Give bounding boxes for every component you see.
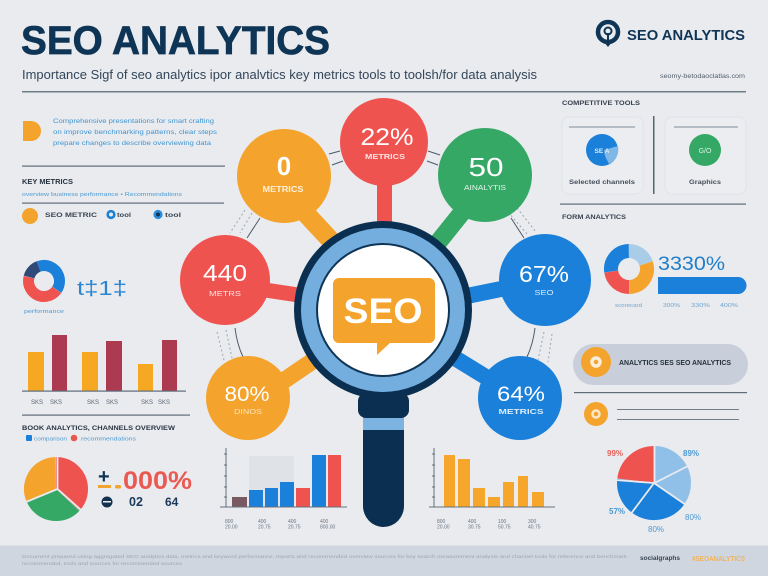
progress labels: 300% bbox=[663, 303, 680, 309]
node: 0 metrics bbox=[237, 129, 331, 223]
axis labels: 400 bbox=[258, 519, 267, 525]
axis labels bbox=[225, 519, 336, 530]
pie labels bbox=[607, 449, 701, 534]
axis labels: 30.75 bbox=[468, 524, 481, 530]
connector: green top right bbox=[436, 190, 480, 245]
stat row: 02 bbox=[129, 495, 143, 509]
donut chart: left bbox=[22, 259, 66, 315]
bar labels: SKS bbox=[31, 400, 43, 406]
bar labels: SKS bbox=[50, 400, 62, 406]
metric chip two bbox=[155, 211, 181, 219]
footer tag: #SEOANALYTICS bbox=[692, 556, 745, 563]
stat row: 64 bbox=[165, 495, 179, 509]
axis labels: 20.75 bbox=[258, 524, 271, 530]
node: 50 analytics: AINALYTIS bbox=[464, 185, 506, 192]
icon: location pin bbox=[598, 22, 618, 47]
axis labels: 50.75 bbox=[498, 524, 511, 530]
pie chart: bottom right bbox=[607, 445, 701, 534]
handle bbox=[358, 393, 409, 527]
key metrics note: overview business performance • Recommendations bbox=[22, 192, 182, 198]
metric chip one: tool bbox=[117, 213, 131, 219]
intro paragraph: on improve benchmarking patterns, clear steps bbox=[53, 129, 218, 136]
stat: percentage: 000% bbox=[123, 467, 192, 495]
legend: comparison bbox=[34, 436, 67, 442]
node: 67% seo: SEO bbox=[534, 288, 554, 297]
logo: SEO Analytics bbox=[598, 22, 745, 47]
website url: seomy-betodaoclatlas.com bbox=[660, 73, 745, 80]
metric chip two: tool bbox=[165, 213, 181, 219]
heading: key metrics: KEY METRICS bbox=[22, 177, 73, 186]
pill: analytics callout bbox=[573, 344, 748, 385]
heading: BOOK ANALYTICS, CHANNELS OVERVIEW bbox=[22, 425, 176, 432]
progress labels bbox=[615, 303, 738, 309]
bar chart: bottom centre right bbox=[429, 448, 555, 530]
axis labels bbox=[437, 519, 541, 530]
card: tool two bbox=[665, 117, 746, 194]
logo text: SEO ANALYTICS bbox=[627, 28, 745, 44]
card: tool two: G/O bbox=[699, 148, 712, 155]
stat: 3330%: 3330% bbox=[658, 254, 725, 275]
card: tool two: Graphics bbox=[689, 179, 721, 186]
connector: orange top left bbox=[284, 190, 335, 245]
lens bbox=[294, 221, 472, 399]
pie labels: 57% bbox=[609, 507, 625, 516]
bar labels: SKS bbox=[158, 400, 170, 406]
intro paragraph: Comprehensive presentations for smart crafting bbox=[53, 118, 214, 125]
card: tool one: Selected channels bbox=[569, 179, 635, 186]
heading: COMPETITIVE TOOLS bbox=[562, 100, 641, 107]
metric chip one bbox=[108, 211, 131, 219]
stat: percentage bbox=[98, 466, 192, 495]
node: 64% metrics: METRICS bbox=[498, 409, 544, 416]
axis labels: 20.00 bbox=[225, 524, 238, 530]
glyph figures: t‡1‡ bbox=[77, 278, 127, 300]
node: 0 metrics: METRICS bbox=[262, 185, 304, 194]
node: 22% metrics bbox=[340, 98, 428, 186]
donut chart: right bbox=[606, 246, 652, 292]
node: 64% metrics: 64% bbox=[497, 383, 545, 406]
node: 440 metrics: 440 bbox=[203, 260, 247, 286]
pie chart bbox=[26, 456, 81, 512]
icon: orange D bbox=[23, 121, 41, 141]
connector: orange bottom left bbox=[248, 356, 320, 405]
bar labels bbox=[31, 400, 170, 406]
metric label: SEO METRIC bbox=[45, 213, 98, 219]
panel: intro text bbox=[23, 118, 218, 147]
axis labels: 800 bbox=[437, 519, 446, 525]
legend: recommendations bbox=[81, 436, 137, 442]
icon: orange dot bbox=[22, 208, 38, 224]
node: 64% metrics bbox=[478, 356, 562, 440]
panel: form analytics bbox=[562, 214, 746, 309]
pie labels: 80% bbox=[685, 513, 701, 522]
magnifying glass bbox=[294, 221, 472, 527]
pill: analytics callout: ANALYTICS SES SEO ANALYTICS bbox=[619, 360, 731, 367]
node: 80% dinos: DINOS bbox=[234, 409, 262, 416]
progress labels: scorecard bbox=[615, 303, 642, 309]
bar chart: bottom centre left bbox=[220, 448, 347, 530]
intro paragraph: prepare changes to describe overviewing data bbox=[53, 140, 211, 147]
axis labels: 800.00 bbox=[320, 524, 336, 530]
axis labels: 20.75 bbox=[288, 524, 301, 530]
connector arcs bbox=[217, 151, 552, 362]
axis labels: 800 bbox=[225, 519, 234, 525]
node: 0 metrics: 0 bbox=[277, 151, 291, 181]
footer text bbox=[22, 554, 628, 566]
bar chart: left bbox=[22, 335, 186, 406]
node: 440 metrics bbox=[180, 235, 270, 325]
node: 50 analytics: 50 bbox=[468, 152, 504, 182]
title: SEO ANALYTICS bbox=[21, 19, 330, 63]
bar labels: SKS bbox=[141, 400, 153, 406]
bar labels: SKS bbox=[87, 400, 99, 406]
axis labels: 40.75 bbox=[528, 524, 541, 530]
panel: book analytics bbox=[22, 425, 192, 512]
connector: blue bottom right bbox=[450, 355, 520, 398]
card: tool one bbox=[562, 117, 643, 194]
axis labels: 400 bbox=[288, 519, 297, 525]
node: 80% dinos bbox=[206, 356, 290, 440]
connector: red top bbox=[377, 170, 392, 235]
node: 67% seo: 67% bbox=[519, 261, 569, 287]
connector: blue right bbox=[462, 280, 545, 297]
progress labels: 400% bbox=[720, 303, 738, 309]
stat: percentage: + bbox=[98, 466, 110, 488]
footer text: recommended, tools and sources for recommended sources bbox=[22, 561, 183, 566]
icon with lines bbox=[584, 402, 739, 426]
seo speech bubble: SEO bbox=[344, 292, 422, 331]
node: 22% metrics: 22% bbox=[360, 124, 414, 151]
progress labels: 330% bbox=[691, 303, 710, 309]
node: 22% metrics: METRICS bbox=[365, 152, 405, 161]
node: 67% seo bbox=[499, 234, 591, 326]
axis labels: 300 bbox=[528, 519, 537, 525]
axis labels: 400 bbox=[468, 519, 477, 525]
intro paragraph bbox=[53, 118, 218, 147]
footer brand: socialgraphs bbox=[640, 556, 681, 562]
panel: competitive tools bbox=[562, 100, 746, 194]
heading: FORM ANALYTICS bbox=[562, 214, 627, 221]
stat row bbox=[102, 495, 179, 509]
footer text: Document prepared using aggregated SEO analytics data, metrics and keyword performance, reports and recommended overview sources for key search measurement analysis and channel tools for reference and benchmark bbox=[22, 554, 628, 559]
node: 80% dinos: 80% bbox=[224, 383, 270, 406]
axis labels: 20.00 bbox=[437, 524, 450, 530]
node: 50 analytics bbox=[438, 128, 532, 222]
footer bbox=[0, 546, 768, 576]
seo speech bubble bbox=[333, 278, 435, 355]
progress bar bbox=[658, 277, 746, 294]
card: tool one: SE A bbox=[595, 148, 610, 155]
pie labels: 89% bbox=[683, 449, 699, 458]
axis labels: 100 bbox=[498, 519, 507, 525]
donut caption: performance bbox=[24, 309, 64, 315]
axis labels: 400 bbox=[320, 519, 329, 525]
bar labels: SKS bbox=[106, 400, 118, 406]
panel: key metrics bbox=[22, 177, 224, 224]
node: 440 metrics: METRS bbox=[209, 289, 241, 298]
subtitle: Importance Sigf of seo analytics ipor analvtics key metrics tools to toolsh/for data analysis bbox=[22, 67, 537, 82]
pie labels: 80% bbox=[648, 525, 664, 534]
legend bbox=[26, 435, 137, 442]
pie labels: 99% bbox=[607, 449, 623, 458]
connector: red left bbox=[225, 284, 305, 296]
